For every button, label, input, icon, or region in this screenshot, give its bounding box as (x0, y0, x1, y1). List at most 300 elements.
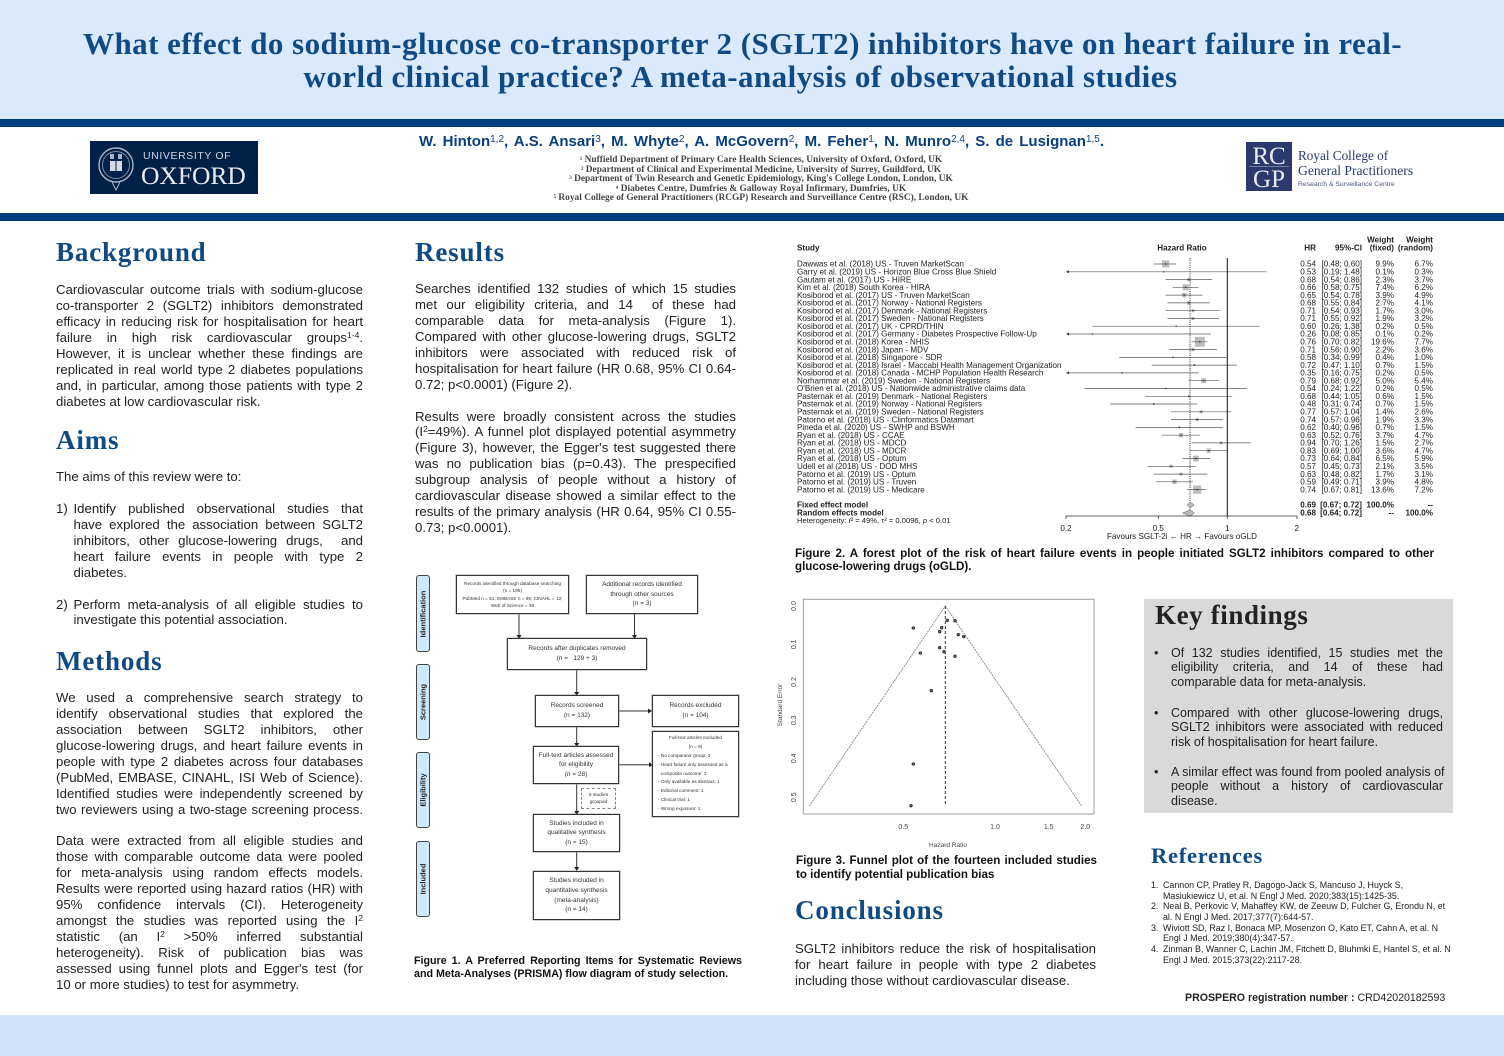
study names: Patorno et al. (2019) US - Optum (797, 470, 916, 479)
box: database records: PubMed n = 51; EMBASE n = 95; CINAHL = 12; (462, 596, 562, 600)
confidence intervals: [0.47; 1.10] (1321, 361, 1362, 370)
fixed weights: 3.9% (1376, 478, 1394, 486)
hazard ratio values: 0.73 (1300, 454, 1316, 463)
text: methods: people with type 2 diabetes across four databases (56, 754, 363, 769)
confidence intervals: [0.52; 0.76] (1321, 431, 1362, 440)
reference list: Wiviott SD, Raz I, Bonaca MP, Mosenzon O, Kato ET, Cahn A, et al. N (1163, 923, 1438, 933)
text: aims: 1) (56, 501, 68, 516)
hazard ratio values: 0.60 (1300, 322, 1316, 331)
confidence intervals: [0.54; 0.93] (1321, 306, 1362, 315)
logo: University of Oxford: UNIVERSITY OF (143, 150, 231, 162)
PRISMA flow diagram (416, 574, 740, 920)
funnel axis labels: 1.0 (990, 824, 1000, 831)
fixed weights: 0.1% (1376, 268, 1394, 276)
x axis: 0.5 (1153, 524, 1164, 533)
box: records screened: (n = 132) (564, 712, 590, 719)
study names: Kosiborod et al. (2017) Sweden - National Registers (797, 314, 984, 323)
study names: O'Brien et al. (2018) US - Nationwide administrative claims data (797, 384, 1026, 393)
reference list: 1. (1151, 880, 1158, 890)
stage tab: Included: Included (418, 864, 428, 894)
forest plot (797, 236, 1433, 541)
study names: Fixed effect model (797, 501, 868, 510)
funnel axis labels: 0.2 (791, 677, 798, 687)
text: aims: inhibitors, other glucose-lowering drugs, and (74, 533, 363, 548)
box: database records: Web of Science = 38 (491, 603, 534, 608)
text: aims: 2) (56, 596, 68, 612)
study names: Kosiborod et al. (2018) Israel - Maccabi Health Management Organization (797, 361, 1062, 370)
x axis: Favours SGLT-2i ← HR → Favours oGLD (1107, 532, 1257, 541)
study names: Ryan et al. (2018) US - MDCD (797, 439, 906, 448)
fixed weights: 0.7% (1376, 361, 1394, 370)
fixed weights: 0.2% (1376, 322, 1394, 331)
study names: Kosiborod et al. (2018) Singapore - SDR (797, 353, 942, 362)
text: methods: for meta-analysis using random effects models. (56, 865, 363, 880)
text: results: (I2=49%). A funnel plot displayed potential asymmetry (415, 424, 736, 439)
x axis: 2 (1294, 524, 1299, 533)
heading: References: References (1151, 843, 1263, 868)
box: full-text excluded: - Heart failure only assessed as a (658, 762, 728, 767)
confidence intervals: [0.57; 1.04] (1321, 408, 1362, 416)
reference list: 3. (1151, 923, 1158, 933)
confidence intervals: [0.64; 0.84] (1321, 454, 1362, 463)
funnel axis labels: 0.5 (898, 824, 908, 831)
box: full-text excluded: Full-text articles excluded (669, 735, 722, 740)
confidence intervals: [0.55; 0.92] (1321, 314, 1362, 323)
logo: Royal College of General Practitioners: General Practitioners (1298, 163, 1413, 178)
box: studies grouped (581, 788, 616, 809)
flow arrows (516, 614, 652, 871)
box: quantitative synthesis: (meta-analysis) (554, 896, 599, 904)
logo: University of Oxford (90, 141, 258, 194)
reference list: Neal B, Perkovic V, Mahaffey KW, de Zeeuw D, Fulcher G, Erondu N, et (1163, 901, 1445, 911)
confidence intervals: [0.55; 0.84] (1321, 299, 1362, 308)
confidence intervals: [0.64; 0.72] (1320, 508, 1362, 518)
key findings list: • (1154, 646, 1158, 660)
box: full-text excluded: - Clinical trial: 1 (658, 797, 690, 802)
funnel axis labels: 0.5 (791, 792, 798, 802)
box: studies grouped: 5 studies (589, 792, 608, 798)
confidence intervals: [0.48; 0.60] (1321, 260, 1362, 269)
hazard ratio values: 0.57 (1300, 462, 1316, 471)
hazard ratio values: 0.35 (1300, 369, 1316, 378)
heading: key findings: Key findings (1155, 600, 1308, 630)
x axis (1060, 516, 1299, 541)
fixed weights: 19.6% (1371, 338, 1394, 346)
hazard ratio values: 0.74 (1300, 415, 1316, 424)
text: methods: identify observational studies that explored the (56, 706, 363, 721)
heading: Results: Results (415, 237, 505, 267)
hazard ratio values: 0.68 (1300, 508, 1316, 518)
text: results: met our eligibility criteria, and 14 of these had (415, 297, 736, 312)
random weights: 4.8% (1415, 478, 1433, 486)
hazard ratio values: 0.48 (1300, 400, 1316, 409)
study names: Kosiborod et al. (2018) Canada - MCHP Population Health Research (797, 369, 1043, 378)
text: results: cardiovascular disease showed a similar effect to the (415, 488, 736, 503)
forest header: HR (1304, 244, 1316, 252)
title: What effect do sodium-glucose co-transporter 2 (SGLT2) inhibitors have on heart failure in real- (83, 26, 1402, 61)
confidence intervals: [0.16; 0.75] (1321, 369, 1362, 378)
logo: Royal College of General Practitioners: Royal College of (1298, 148, 1389, 163)
forest header: (fixed) (1370, 244, 1394, 252)
box: full-text assessed (533, 746, 619, 784)
study names: Patorno et al. (2018) US - Clinformatics Datamart (797, 415, 975, 424)
fixed weights: -- (1389, 508, 1394, 518)
reference list: 4. (1151, 944, 1158, 954)
plot marks (1066, 258, 1267, 516)
text: background: diabetes at low cardiovascular risk. (56, 394, 260, 409)
fixed weights: 1.5% (1376, 439, 1394, 448)
random weights: 5.4% (1415, 376, 1433, 385)
logo: Royal College of General Practitioners: GP (1253, 166, 1285, 193)
funnel points (910, 619, 965, 807)
study names: Kosiborod et al. (2018) Japan - MDV (797, 345, 929, 354)
random weights: 0.5% (1415, 369, 1433, 378)
random weights: 3.3% (1415, 415, 1433, 424)
panel: key findings (1144, 599, 1453, 813)
fixed weights: 9.9% (1376, 260, 1394, 269)
random weights: 0.5% (1415, 322, 1433, 331)
confidence intervals: [0.48; 0.82] (1321, 470, 1362, 479)
forest header: Weight (1367, 236, 1394, 244)
confidence intervals: [0.69; 1.00] (1321, 446, 1362, 455)
study names: Patorno et al. (2019) US - Truven (797, 478, 916, 486)
confidence intervals: [0.68; 0.92] (1321, 376, 1362, 385)
forest header: Weight (1406, 236, 1433, 244)
box: full-text assessed: (n = 28) (565, 771, 587, 778)
forest header: Hazard Ratio (1157, 244, 1207, 252)
text: aims: heart failure events in people with type 2 (74, 549, 363, 564)
funnel axis labels: 0.0 (791, 601, 798, 611)
text: methods: We used a comprehensive search strategy to (56, 690, 363, 705)
box: studies grouped: grouped (590, 800, 607, 804)
study names: Norhammar et al. (2019) Sweden - National Registers (797, 376, 990, 385)
hazard ratio values: 0.62 (1300, 423, 1316, 432)
funnel axis labels: Standard Error (777, 683, 784, 726)
random weights: 0.3% (1415, 268, 1433, 276)
text: results (415, 281, 736, 535)
confidence intervals: [0.54; 0.86] (1321, 275, 1362, 284)
heading: Conclusions: Conclusions (795, 895, 944, 925)
header band (0, 0, 1504, 119)
heading: Aims: Aims (56, 425, 119, 455)
confidence intervals: [0.56; 0.90] (1321, 345, 1362, 354)
text: results: Compared with other glucose-lowering drugs, SGLT2 (415, 329, 736, 344)
text: methods: association between SGLT2 inhibitors, other (56, 722, 363, 737)
random weights: 3.7% (1415, 275, 1433, 284)
authors: W. Hinton1,2, A.S. Ansari3, M. Whyte2, A. McGovern2, M. Feher1, N. Munro2,4, S. de Lusignan1,5. (419, 133, 1104, 150)
reference list: Masiukiewicz U, et al. N Engl J Med. 2020;383(15):1425-35. (1163, 891, 1399, 901)
hazard ratio values: 0.76 (1300, 338, 1316, 346)
confidence intervals: [0.70; 1.26] (1321, 439, 1362, 448)
box: qualitative synthesis: Studies included in (549, 820, 604, 827)
random weights: 3.6% (1415, 345, 1433, 354)
text: aims: have explored the association between SGLT2 (74, 517, 363, 532)
stage tab: Identification: Identification (418, 590, 428, 637)
funnel axis labels: 1.5 (1044, 824, 1054, 831)
box: other sources: through other sources (610, 591, 674, 598)
random weights: 1.0% (1415, 353, 1433, 362)
text: background: Cardiovascular outcome trials with sodium-glucose (56, 282, 363, 297)
fixed weights: 3.9% (1376, 291, 1394, 300)
hazard ratio values: 0.65 (1300, 291, 1316, 300)
text: aims: Identify published observational studies that (74, 501, 363, 516)
random weights: 4.7% (1415, 431, 1433, 440)
random weights: 4.7% (1415, 446, 1433, 455)
confidence intervals: [0.40; 0.96] (1321, 423, 1362, 432)
study names: Pasternak et al. (2019) Norway - National Registers (797, 400, 982, 409)
title (83, 26, 1402, 94)
box: other sources: (n = 3) (633, 600, 651, 607)
box: database records: (n = 196) (503, 588, 522, 593)
random weights: 4.1% (1415, 299, 1433, 308)
logo: Royal College of General Practitioners (1246, 142, 1413, 193)
random weights (1406, 260, 1433, 518)
box: after duplicates: (n = 129 + 3) (557, 655, 597, 662)
box: full-text excluded (652, 731, 739, 817)
hazard ratio values: 0.68 (1300, 275, 1316, 284)
text: methods: two reviewers using a two-stage screening process. (56, 802, 363, 817)
box: after duplicates (507, 638, 647, 670)
random weights: 0.5% (1415, 384, 1433, 393)
confidence intervals: [0.57; 0.96] (1321, 415, 1362, 424)
forest header: 95%-CI (1335, 244, 1362, 252)
study names: Pasternak et al. (2019) Denmark - National Registers (797, 392, 987, 401)
text: methods: Identified studies were independently screened by (56, 786, 363, 801)
confidence intervals: [0.49; 0.71] (1321, 478, 1362, 486)
confidence intervals (1320, 260, 1362, 518)
text: results: 0.73; p<0.0001). (415, 520, 511, 535)
text: background: co-transporter 2 (SGLT2) inhibitors demonstrated (56, 298, 363, 313)
hazard ratio values: 0.53 (1300, 268, 1316, 276)
text: methods: 10 or more studies) to test for asymmetry. (56, 977, 299, 992)
stage tab: Identification (416, 575, 430, 652)
fixed weights: 2.3% (1376, 275, 1394, 284)
confidence intervals: [0.24; 1.22] (1321, 384, 1362, 393)
box: full-text assessed: Full-text articles assessed (539, 752, 613, 759)
study names: Random effects model (797, 508, 884, 518)
affiliations: 5 Royal College of General Practitioners (RCGP) Research and Surveillance Centre (RSC), London, UK (554, 193, 968, 203)
text: methods: (PubMed, EMBASE, CINAHL, ISI Web of Science). (56, 770, 363, 785)
hazard ratio values: 0.54 (1300, 260, 1316, 269)
stage tab: Eligibility: Eligibility (418, 773, 428, 807)
text: background: replicated in real world type 2 diabetes populations (56, 362, 363, 377)
box: full-text excluded: - No comparator group: 3 (658, 753, 710, 758)
stage tab: Eligibility (416, 752, 430, 828)
figure 1 caption: Figure 1. A Preferred Reporting Items for Systematic Reviews (414, 955, 742, 967)
fixed weights: 0.6% (1376, 392, 1394, 401)
random weights: 1.5% (1415, 392, 1433, 401)
logo: Royal College of General Practitioners: Research & Surveillance Centre (1298, 181, 1395, 188)
fixed weights: 13.6% (1371, 485, 1394, 494)
text: results: comparable data for meta-analysis (Figure 1). (415, 313, 736, 328)
key findings list: eligibility criteria, and 14 of these had (1171, 660, 1443, 674)
forest header: (random) (1398, 244, 1433, 252)
figure 2 caption: glucose-lowering drugs (oGLD). (795, 560, 971, 573)
footer band (0, 1015, 1504, 1056)
figure 3 caption (796, 854, 1097, 881)
hazard ratio values: 0.68 (1300, 392, 1316, 401)
reference list: Engl J Med. 2019;380(4):347-57. (1163, 933, 1293, 943)
funnel plot (777, 598, 1094, 849)
box: records screened: Records screened (551, 702, 603, 709)
text: aims (56, 469, 363, 627)
logo: University of Oxford: OXFORD (141, 161, 246, 190)
hazard ratio values: 0.26 (1300, 330, 1316, 339)
study names: Kosiborod et al. (2017) Denmark - National Registers (797, 306, 987, 315)
study names: Ryan et al. (2018) US - MDCR (797, 446, 906, 455)
key findings list: Compared with other glucose-lowering drugs, (1171, 706, 1443, 720)
box: records excluded: (n = 104) (682, 712, 709, 719)
fixed weights: 1.9% (1376, 415, 1394, 424)
key findings list: comparable data for meta-analysis. (1171, 675, 1366, 689)
study names: Kosiborod et al. (2017) Norway - National Registers (797, 299, 982, 308)
stage tab: Screening (416, 664, 430, 740)
fixed weights: 1.7% (1376, 470, 1394, 479)
text: methods: those with comparable outcome data were pooled (56, 849, 363, 864)
random weights: 6.7% (1415, 260, 1433, 269)
affiliations: 2 Department of Clinical and Experimental Medicine, University of Surrey, Guildford, UK (581, 164, 941, 174)
stage tab: Screening: Screening (418, 684, 428, 720)
affiliations (554, 155, 968, 203)
key findings list: people without a history of cardiovascular (1171, 779, 1443, 793)
random weights: -- (1428, 501, 1433, 510)
box: records excluded: Records excluded (669, 702, 722, 709)
text: background: failure in high risk cardiovascular groups1-4. (56, 330, 363, 345)
confidence intervals: [0.08; 0.85] (1321, 330, 1362, 339)
study names: Dawwas et al. (2018) US - Truven MarketScan (797, 260, 964, 269)
fixed weights: 6.5% (1376, 454, 1394, 463)
hazard ratio values: 0.83 (1300, 446, 1316, 455)
funnel axis labels (777, 601, 1090, 849)
box: records screened (535, 695, 619, 727)
text: conclusions: for heart failure in people with type 2 diabetes (795, 957, 1096, 972)
study names (797, 260, 1062, 525)
text: aims: Perform meta-analysis of all eligible studies to (74, 596, 363, 612)
funnel axis labels: 0.3 (791, 715, 798, 725)
box: quantitative synthesis: (n = 14) (565, 906, 588, 913)
confidence intervals: [0.67; 0.72] (1320, 501, 1362, 510)
fixed weights: 2.7% (1376, 299, 1394, 308)
hazard ratio values: 0.77 (1300, 408, 1316, 416)
box: records excluded (652, 695, 739, 727)
stage tab: Included (416, 841, 430, 917)
fixed weights: 0.2% (1376, 384, 1394, 393)
random weights: 0.2% (1415, 330, 1433, 339)
box: quantitative synthesis: Studies included in (549, 877, 604, 884)
title: world clinical practice? A meta-analysis of observational studies (304, 58, 1177, 94)
text: aims: investigate this potential association. (74, 612, 288, 627)
hazard ratio values: 0.63 (1300, 470, 1316, 479)
random weights: 1.5% (1415, 423, 1433, 432)
hazard ratio values: 0.79 (1300, 376, 1316, 385)
random weights: 4.9% (1415, 291, 1433, 300)
confidence intervals: [0.26; 1.38] (1321, 322, 1362, 331)
confidence intervals: [0.67; 0.81] (1321, 485, 1362, 494)
study names: Garry et al. (2019) US - Horizon Blue Cross Blue Shield (797, 268, 996, 276)
fixed weights (1367, 260, 1394, 518)
hazard ratio values (1300, 260, 1316, 518)
text: aims: The aims of this review were to: (56, 469, 241, 484)
text: results: (Figure 3), however, the Egger's test suggested there (415, 440, 736, 455)
random weights: 100.0% (1406, 508, 1433, 518)
figure 1 caption (414, 955, 742, 980)
fixed weights: 1.9% (1376, 314, 1394, 323)
study names: Ryan et al. (2018) US - CCAE (797, 431, 905, 440)
fixed weights: 1.4% (1376, 408, 1394, 416)
box: other sources (586, 575, 698, 614)
box: other sources: Additional records identified (602, 581, 682, 588)
key findings list: • (1154, 706, 1158, 720)
random weights: 2.6% (1415, 408, 1433, 416)
reference list: Zinman B, Wanner C, Lachin JM, Fitchett D, Bluhmki E, Hantel S, et al. N (1163, 944, 1451, 954)
random weights: 2.7% (1415, 439, 1433, 448)
figure 1 caption: and Meta-Analyses (PRISMA) flow diagram of study selection. (414, 968, 728, 980)
confidence intervals: [0.44; 1.05] (1321, 392, 1362, 401)
affiliations: 1 Nuffield Department of Primary Care Health Sciences, University of Oxford, Oxford, UK (580, 155, 942, 165)
fixed weights: 2.1% (1376, 462, 1394, 471)
text: methods: 95% confidence intervals (CI). Heterogeneity (56, 897, 363, 912)
random weights: 3.2% (1415, 314, 1433, 323)
confidence intervals: [0.34; 0.99] (1321, 353, 1362, 362)
key findings list: A similar effect was found from pooled analysis of (1171, 764, 1445, 778)
random weights: 3.0% (1415, 306, 1433, 315)
random weights: 5.9% (1415, 454, 1433, 463)
text: methods: heterogeneity). Risk of publication bias was (56, 945, 363, 960)
confidence intervals: [0.58; 0.75] (1321, 283, 1362, 292)
text: results: Results were broadly consistent across the studies (415, 408, 736, 424)
box: database records (456, 575, 569, 614)
study names: Kosiborod et al. (2017) UK - CPRD/THIN (797, 322, 944, 331)
key findings list: disease. (1171, 794, 1218, 808)
confidence intervals: [0.45; 0.73] (1321, 462, 1362, 471)
text: results: subgroup analysis of people without a history of (415, 472, 736, 487)
study names: Kim et al. (2018) South Korea - HIRA (797, 283, 931, 292)
text: results: inhibitors were associated with reduced risk of (415, 345, 736, 360)
fixed weights: 5.0% (1376, 376, 1394, 385)
text: methods: glucose-lowering drugs, and heart failure events in (56, 738, 363, 753)
random weights: 3.1% (1415, 470, 1433, 479)
affiliations: 4 Diabetes Centre, Dumfries & Galloway Royal Infirmary, Dumfries, UK (616, 184, 906, 194)
fixed weights: 0.7% (1376, 423, 1394, 432)
random weights: 3.5% (1415, 462, 1433, 471)
figure 3 caption: Figure 3. Funnel plot of the fourteen included studies (796, 854, 1097, 867)
hazard ratio values: 0.59 (1300, 478, 1316, 486)
hazard ratio values: 0.72 (1300, 361, 1316, 370)
text: results: 0.72; p<0.0001) (Figure 2). (415, 377, 572, 392)
fixed weights: 0.1% (1376, 330, 1394, 339)
figure 3 caption: to identify potential publication bias (796, 868, 994, 881)
study names: Patorno et al. (2019) US - Medicare (797, 485, 925, 494)
key findings list: SGLT2 inhibitors were associated with reduced (1171, 720, 1443, 734)
confidence intervals: [0.70; 0.82] (1321, 338, 1362, 346)
fixed weights: 2.2% (1376, 345, 1394, 354)
confidence intervals: [0.31; 0.74] (1321, 400, 1362, 409)
reference list: Cannon CP, Pratley R, Dagogo-Jack S, Mancuso J, Huyck S, (1163, 880, 1403, 890)
x axis: 1 (1225, 524, 1230, 533)
text: background: and, in particular, among those patients with type 2 (56, 378, 363, 393)
text: methods: assessed using funnel plots and Egger's test (for (56, 961, 363, 976)
figure 2 caption: Figure 2. A forest plot of the risk of heart failure events in people initiated SGLT2 inhibitors compared to other (795, 547, 1434, 560)
text: results: hospitalisation for heart failure (HR 0.68, 95% CI 0.64- (415, 361, 736, 376)
hazard ratio values: 0.71 (1300, 314, 1316, 323)
text: results: was no publication bias (p=0.43). The prespecified (415, 456, 736, 471)
heading: Methods: Methods (56, 646, 162, 676)
key findings list: risk of hospitalisation for heart failure. (1171, 735, 1378, 749)
fixed weights: 1.7% (1376, 306, 1394, 315)
random weights: 7.7% (1415, 338, 1433, 346)
reference list (1151, 880, 1451, 965)
fixed weights: 3.7% (1376, 431, 1394, 440)
